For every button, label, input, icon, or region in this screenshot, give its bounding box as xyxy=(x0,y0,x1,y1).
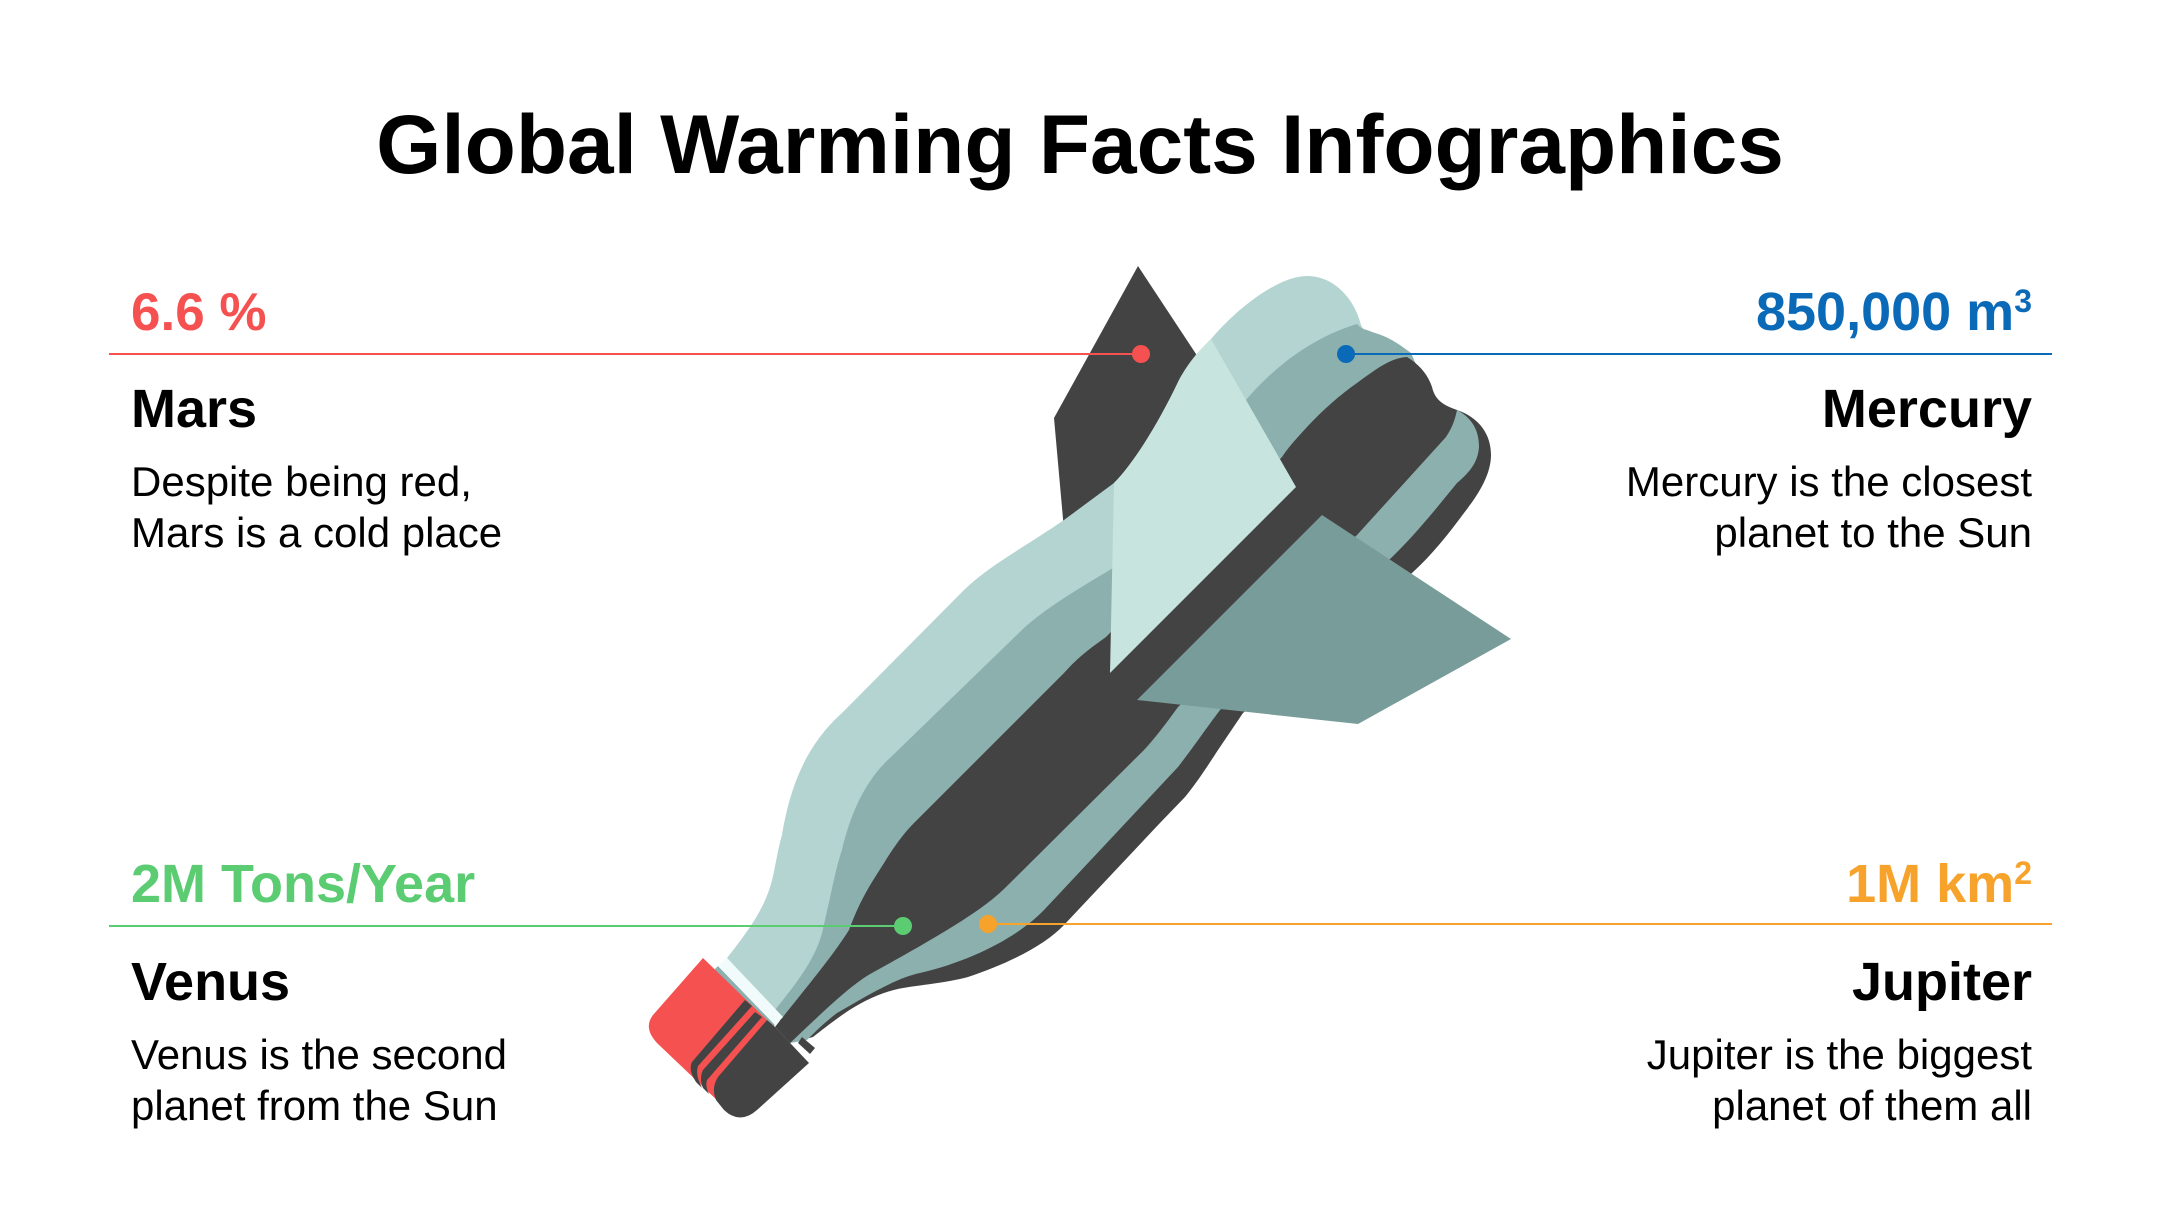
bottle highlight layer xyxy=(727,276,1400,1010)
illustration: plastic bottle rocket xyxy=(649,266,1511,1118)
text: Mercury description: planet to the Sun xyxy=(1714,509,2032,556)
bottle cap xyxy=(649,958,809,1118)
value: 6.6 %: 6.6 % xyxy=(131,283,267,342)
callout: Jupiter xyxy=(979,854,2052,1129)
text: Mercury description: Mercury is the closest xyxy=(1626,458,2032,505)
title: Global Warming Facts Infographics xyxy=(376,97,1784,191)
text: Venus description: Venus is the second xyxy=(131,1031,507,1078)
text: Jupiter description: planet of them all xyxy=(1712,1082,2032,1129)
back fin xyxy=(1054,266,1196,560)
text: Venus description: planet from the Sun xyxy=(131,1082,498,1129)
value: 2M Tons/Year: 2M Tons/Year xyxy=(131,854,475,914)
bottle shadow layer xyxy=(790,410,1491,1043)
text: Jupiter description: Jupiter is the biggest xyxy=(1647,1031,2032,1078)
callout: Mars xyxy=(109,283,1150,556)
leader line: Jupiter xyxy=(979,915,2052,933)
heading: Mars: Mars xyxy=(131,379,257,439)
bottle neck ring xyxy=(714,958,815,1054)
text: Mars description: Mars is a cold place xyxy=(131,509,502,556)
front pale fin xyxy=(1110,339,1296,673)
bottle dark interior xyxy=(775,357,1457,1043)
front teal fin xyxy=(1137,515,1511,724)
heading: Venus: Venus xyxy=(131,952,290,1012)
value: 850,000 m3: 3 xyxy=(2014,283,2032,319)
leader line: Mercury xyxy=(1337,345,2052,363)
value: 850,000 m3: 850,000 m xyxy=(1756,282,2014,342)
bottle lower reflection band xyxy=(790,410,1479,1043)
text: Mars description: Despite being red, xyxy=(131,458,472,505)
bottle mid layer xyxy=(775,324,1440,1043)
heading: Mercury: Mercury xyxy=(1822,379,2032,439)
heading: Jupiter: Jupiter xyxy=(1852,952,2032,1012)
callout: Mercury xyxy=(1337,282,2052,556)
value: 1M km2: 1M km xyxy=(1846,854,2014,914)
value: 1M km2: 2 xyxy=(2014,855,2032,891)
callout: Venus xyxy=(109,854,912,1129)
leader line: Mars xyxy=(109,345,1150,363)
leader line: Venus xyxy=(109,917,912,935)
